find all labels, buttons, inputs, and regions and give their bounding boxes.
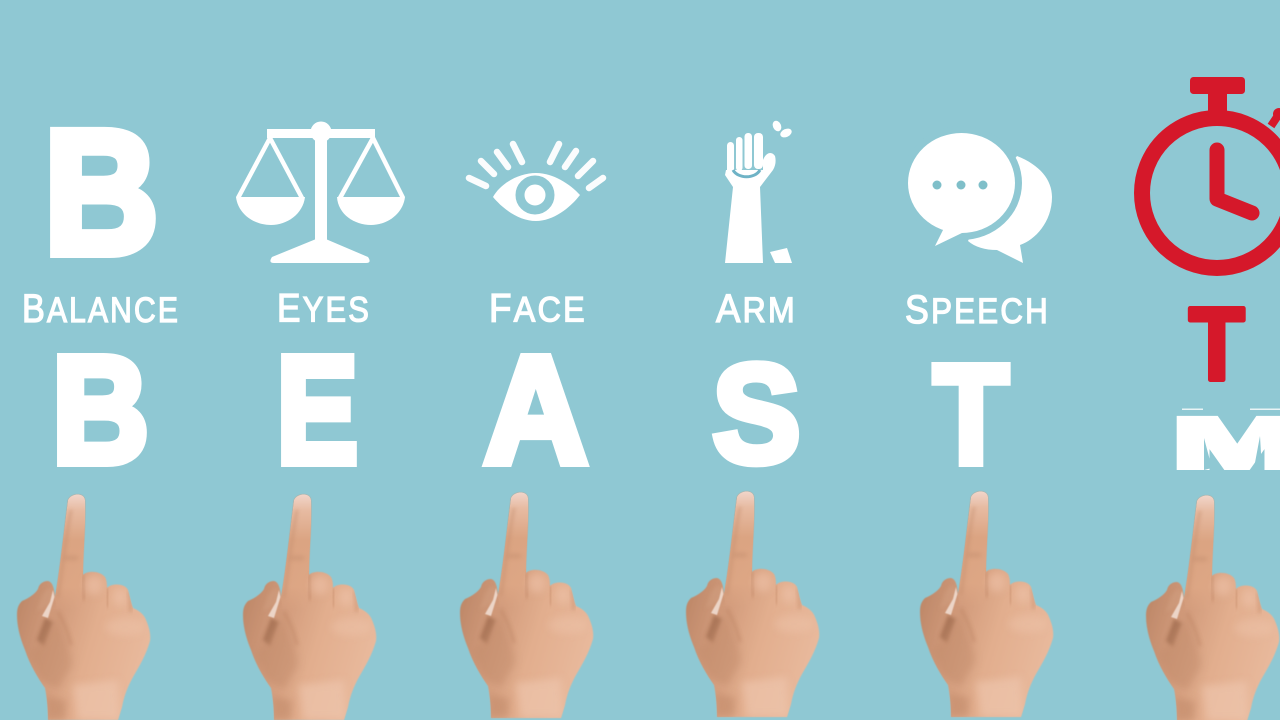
big letter B for Balance: B	[44, 95, 158, 291]
label: Face: FACE	[489, 286, 587, 330]
icon: red stopwatch	[1142, 77, 1280, 268]
hand 5	[920, 491, 1053, 717]
letter T in red: T	[1189, 286, 1244, 402]
label: Eyes: EYES	[277, 286, 371, 330]
icon: speech bubbles	[901, 126, 1052, 263]
hand 2	[243, 494, 376, 720]
icon: eye with lashes	[469, 144, 603, 221]
letter A: A	[484, 326, 588, 496]
letter M cropped at the right edge: M	[1173, 404, 1280, 482]
label: Speech: SPEECH	[905, 288, 1050, 332]
label: Balance: BALANCE	[22, 287, 180, 331]
letter T: T	[934, 335, 1008, 493]
hand 3	[460, 492, 593, 718]
letter E: E	[276, 326, 358, 496]
letter M cropped at the right edge	[1173, 404, 1280, 482]
hand 6	[1146, 495, 1279, 720]
letter S: S	[712, 335, 800, 492]
label: Arm: ARM	[716, 287, 797, 331]
icon: balance scales	[236, 122, 405, 263]
icon: raised arm	[725, 119, 793, 263]
hand 4	[686, 491, 819, 717]
hand 1	[17, 494, 150, 720]
letter B: B	[52, 326, 149, 496]
